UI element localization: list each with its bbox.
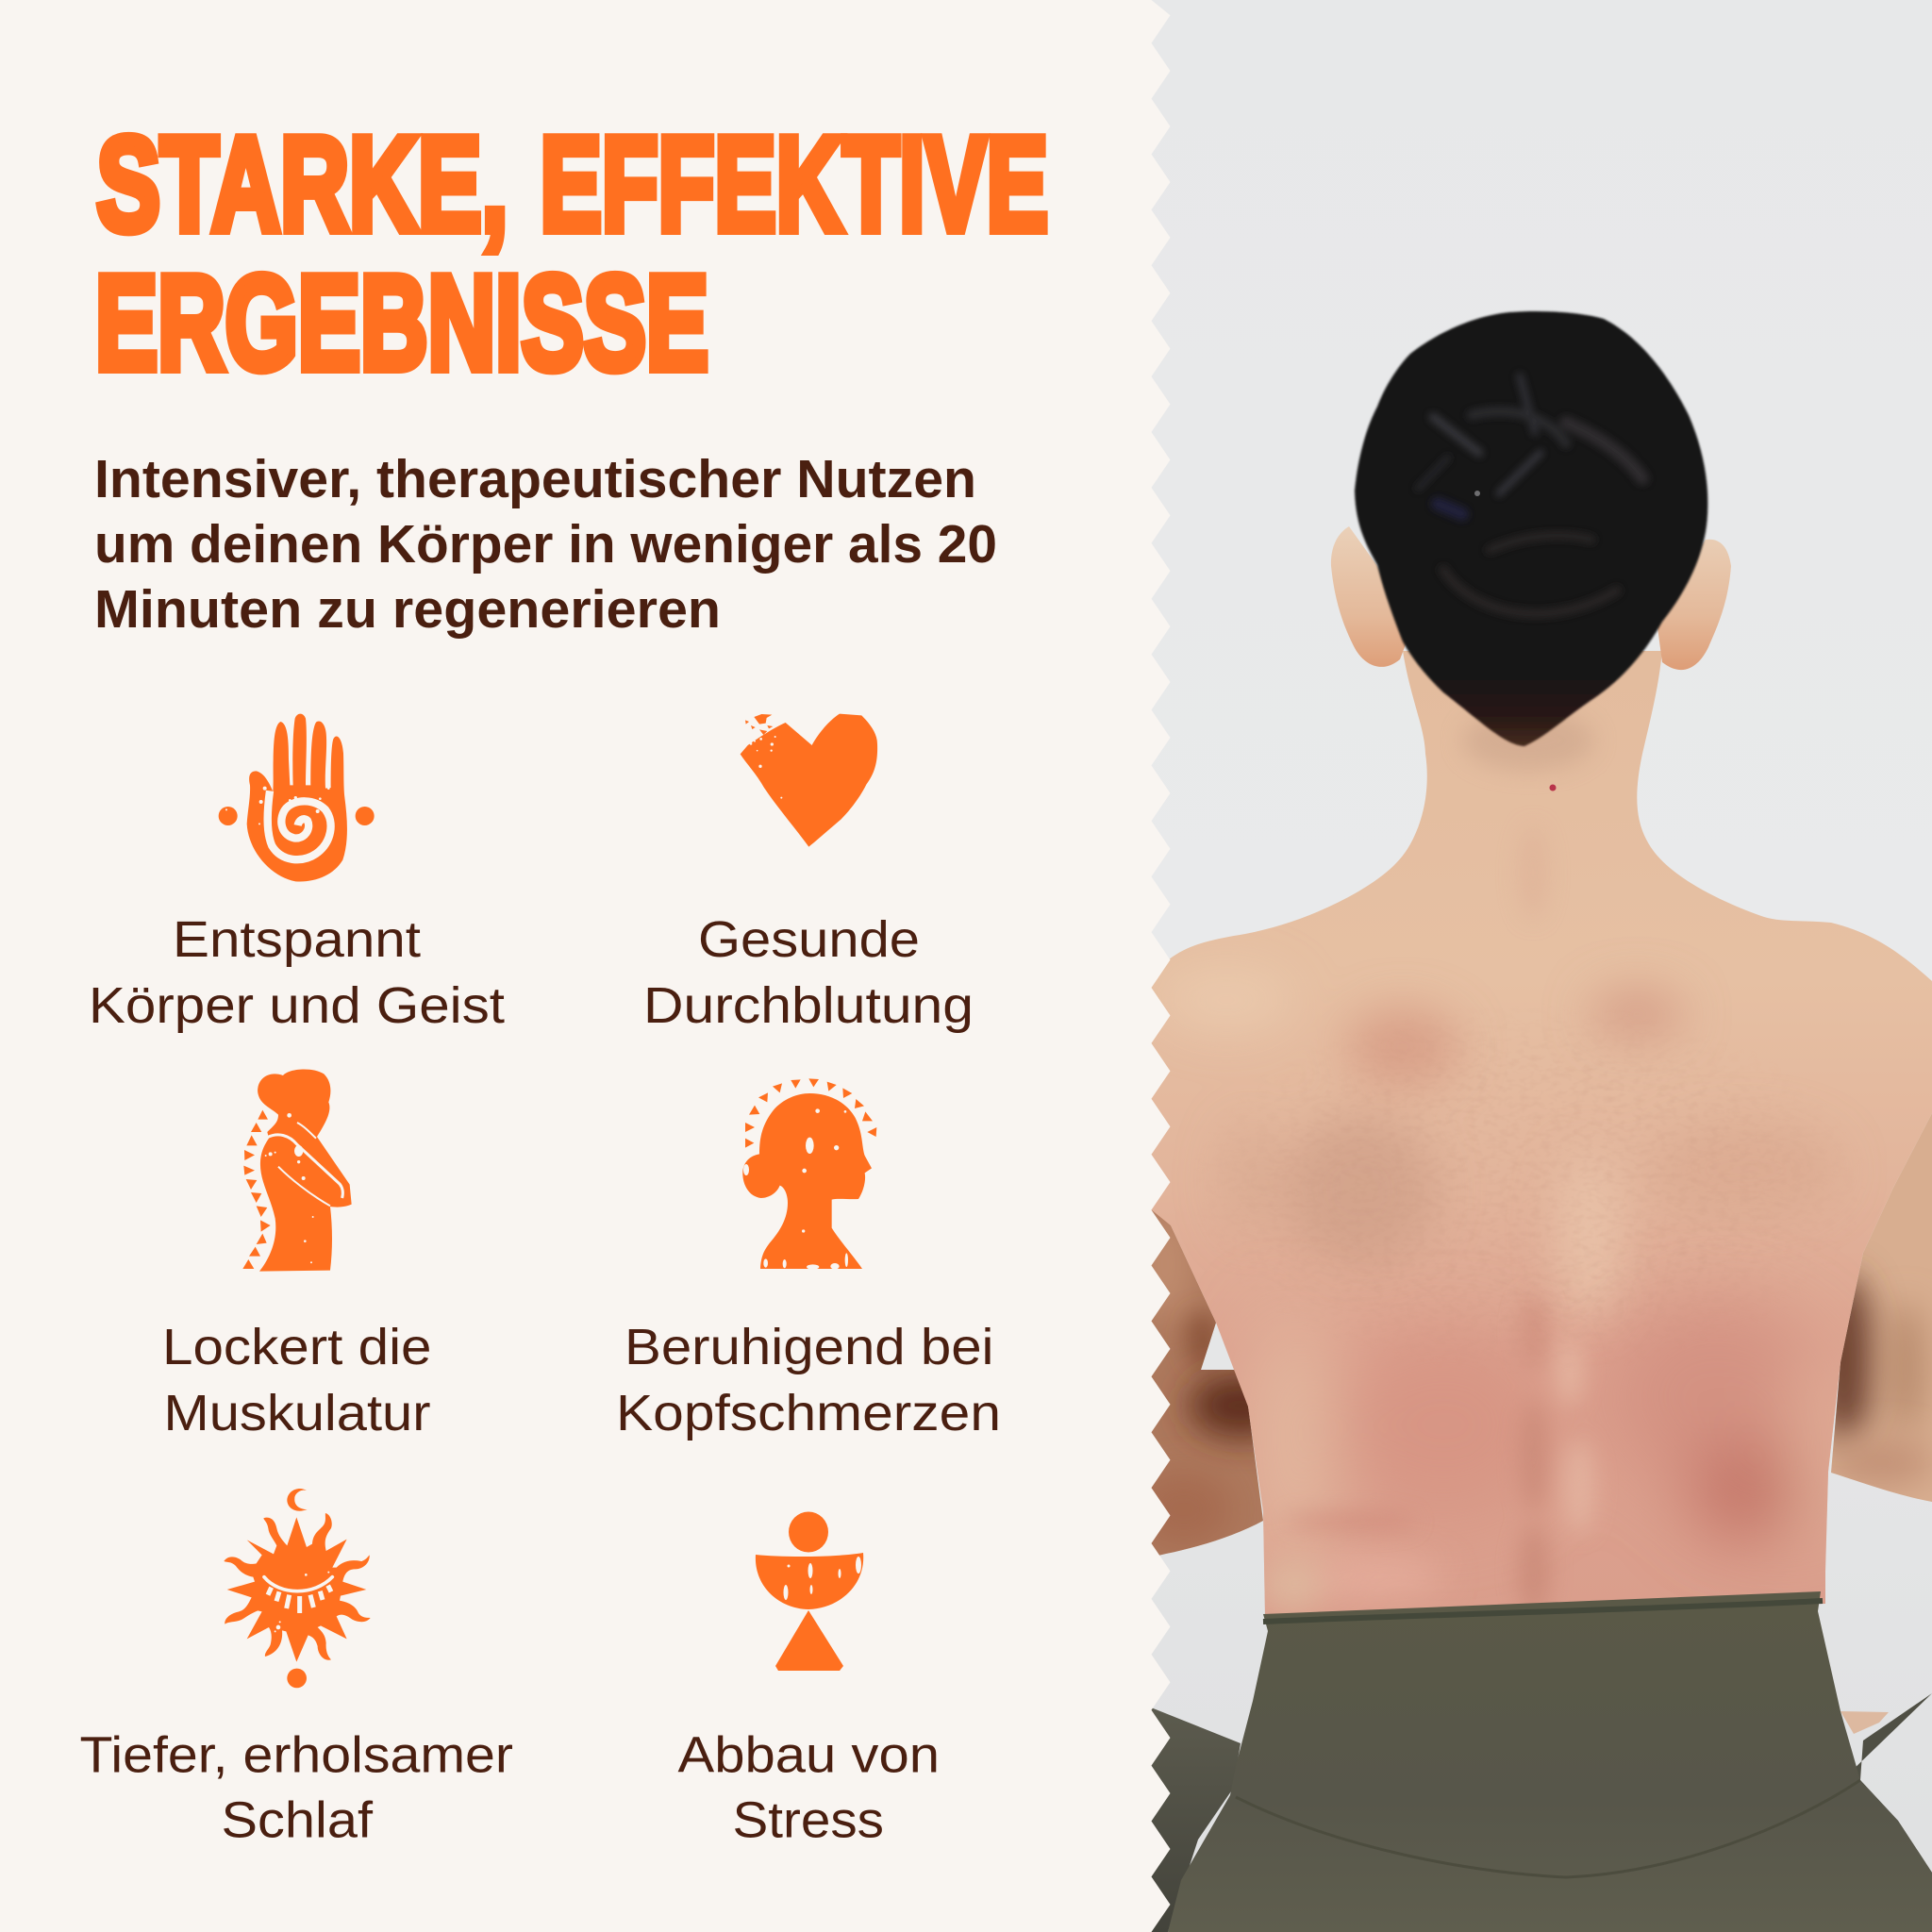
benefit: Lockert die Muskulatur: [162, 1069, 432, 1441]
label: Entspannt: [173, 911, 421, 968]
icon: chalice with ball: [756, 1511, 863, 1671]
label: Stress: [732, 1792, 884, 1849]
label: Durchblutung: [643, 977, 974, 1034]
benefit: Tiefer, erholsamer Schlaf: [79, 1489, 513, 1849]
title: ERGEBNISSE: [95, 248, 708, 398]
icon: sun with closed eye: [224, 1489, 371, 1688]
title: [95, 109, 1048, 398]
benefit: Gesunde Durchblutung: [643, 714, 974, 1034]
mole: [1549, 785, 1557, 791]
label: Körper und Geist: [89, 977, 505, 1034]
icon: heart: [741, 714, 877, 847]
label: Tiefer, erholsamer: [79, 1726, 513, 1783]
benefit: Beruhigend bei Kopfschmerzen: [616, 1078, 1001, 1441]
hair bun: [1355, 311, 1707, 746]
label: [89, 911, 505, 1034]
label: Gesunde: [698, 911, 920, 968]
benefit: Abbau von Stress: [677, 1511, 940, 1849]
icon: hand with spiral: [219, 714, 375, 881]
label: [79, 1726, 513, 1849]
right arm: [1814, 1104, 1932, 1509]
subheading: Minuten zu regenerieren: [94, 579, 721, 640]
title: STARKE,: [96, 109, 508, 259]
label: Schlaf: [221, 1792, 374, 1849]
label: Lockert die: [162, 1319, 432, 1375]
label: [643, 911, 974, 1034]
label: [677, 1726, 940, 1849]
label: Abbau von: [677, 1726, 940, 1783]
icon: body with spine: [242, 1069, 352, 1272]
title: EFFEKTIVE: [540, 109, 1048, 259]
right ear: [1656, 540, 1731, 670]
label: Muskulatur: [164, 1385, 431, 1441]
left ear: [1331, 526, 1410, 667]
cream panel with zigzag edge: [0, 0, 1170, 1932]
label: [616, 1319, 1001, 1441]
benefit: Entspannt Körper und Geist: [89, 714, 505, 1034]
leggings: [1168, 1591, 1932, 1932]
label: Beruhigend bei: [625, 1319, 994, 1375]
photo: woman's back with massage marks: [1132, 0, 1932, 1932]
label: Kopfschmerzen: [616, 1385, 1001, 1441]
icon: head with halo: [742, 1078, 876, 1270]
left leg: [1146, 1706, 1241, 1932]
subheading: Intensiver, therapeutischer Nutzen: [94, 449, 976, 509]
torso and neck: [1132, 641, 1932, 1632]
subheading: um deinen Körper in weniger als 20: [94, 514, 997, 575]
label: [162, 1319, 432, 1441]
right leg: [1849, 1693, 1932, 1932]
subheading: [94, 449, 997, 640]
left arm: [1137, 1198, 1292, 1566]
